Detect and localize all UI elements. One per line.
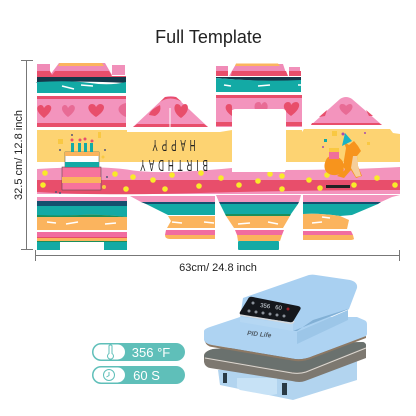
press: grey heating plate (204, 342, 366, 382)
press: upper arm (240, 275, 357, 331)
heat press machine: 356 (260, 303, 271, 310)
template: right heart band (216, 95, 302, 127)
heat press machine (204, 275, 367, 400)
press: base (218, 360, 357, 400)
badge: time (92, 366, 185, 384)
template: left triangular flap (133, 96, 208, 128)
template: right triangular flap (311, 97, 382, 125)
template: lower tapered panel (216, 195, 301, 250)
title: Full Template (155, 27, 262, 47)
text: happy birthday upside down (136, 136, 208, 174)
template: lower right panel (303, 195, 400, 240)
template: top left box panel (36, 63, 126, 93)
press: control panel (240, 297, 301, 322)
badge: temperature: 356 °F (132, 345, 170, 360)
template: top right box panel (216, 64, 301, 92)
width dimension line (35, 250, 400, 261)
template: yellow band (37, 129, 400, 162)
height dimension line (21, 60, 33, 250)
text: happy birthday upside down: BIRTHDAY (136, 156, 208, 174)
template: lower centre panel (130, 196, 215, 239)
template: pink and red dotted band (37, 167, 400, 194)
heat press machine: 60 (275, 305, 283, 312)
press: blue top plate (204, 317, 367, 359)
icon: thermometer (108, 345, 114, 359)
badge: temperature (92, 343, 185, 361)
illustration: squirrel (322, 131, 370, 188)
badge: time: 60 S (133, 368, 160, 383)
icon: clock (104, 370, 114, 380)
template: left heart band (37, 96, 126, 127)
template: cut-out window (232, 109, 286, 172)
press: brand text: PID Life (247, 330, 272, 340)
illustration: birthday cake (55, 132, 108, 194)
template: lower left panel (37, 197, 127, 250)
text: happy birthday upside down: HAPPY (148, 136, 196, 154)
height label: 32.5 cm/ 12.8 inch (13, 110, 25, 200)
width label: 63cm/ 24.8 inch (179, 262, 257, 274)
